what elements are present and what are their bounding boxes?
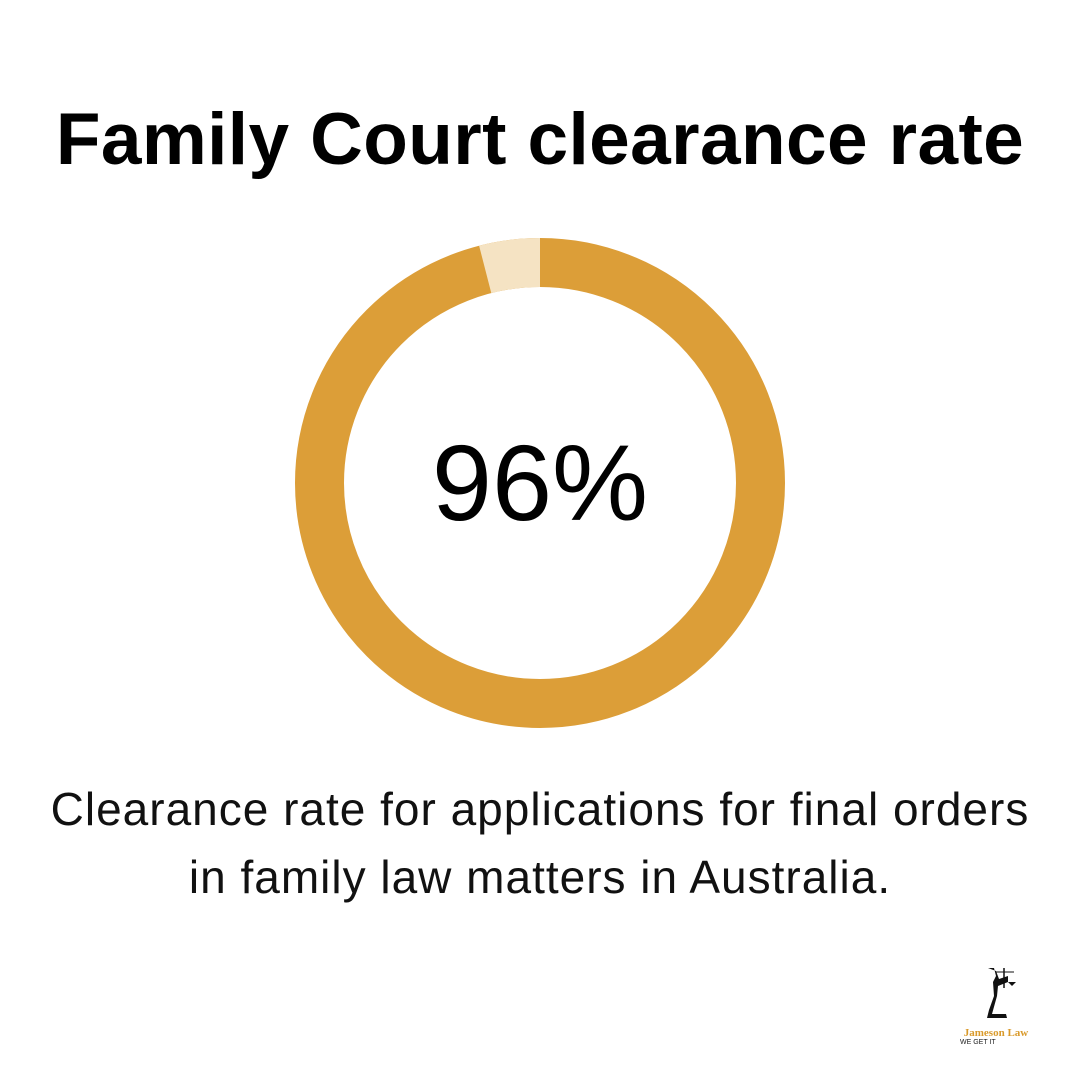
description: Clearance rate for applications for final orders	[51, 783, 1029, 835]
description	[51, 783, 1029, 903]
logo: Jameson Law	[964, 1027, 1028, 1039]
logo	[960, 968, 1028, 1046]
description: in family law matters in Australia.	[189, 851, 891, 903]
title: Family Court clearance rate	[56, 99, 1024, 180]
logo: WE GET IT	[960, 1039, 996, 1046]
big number: 96%	[432, 422, 648, 543]
